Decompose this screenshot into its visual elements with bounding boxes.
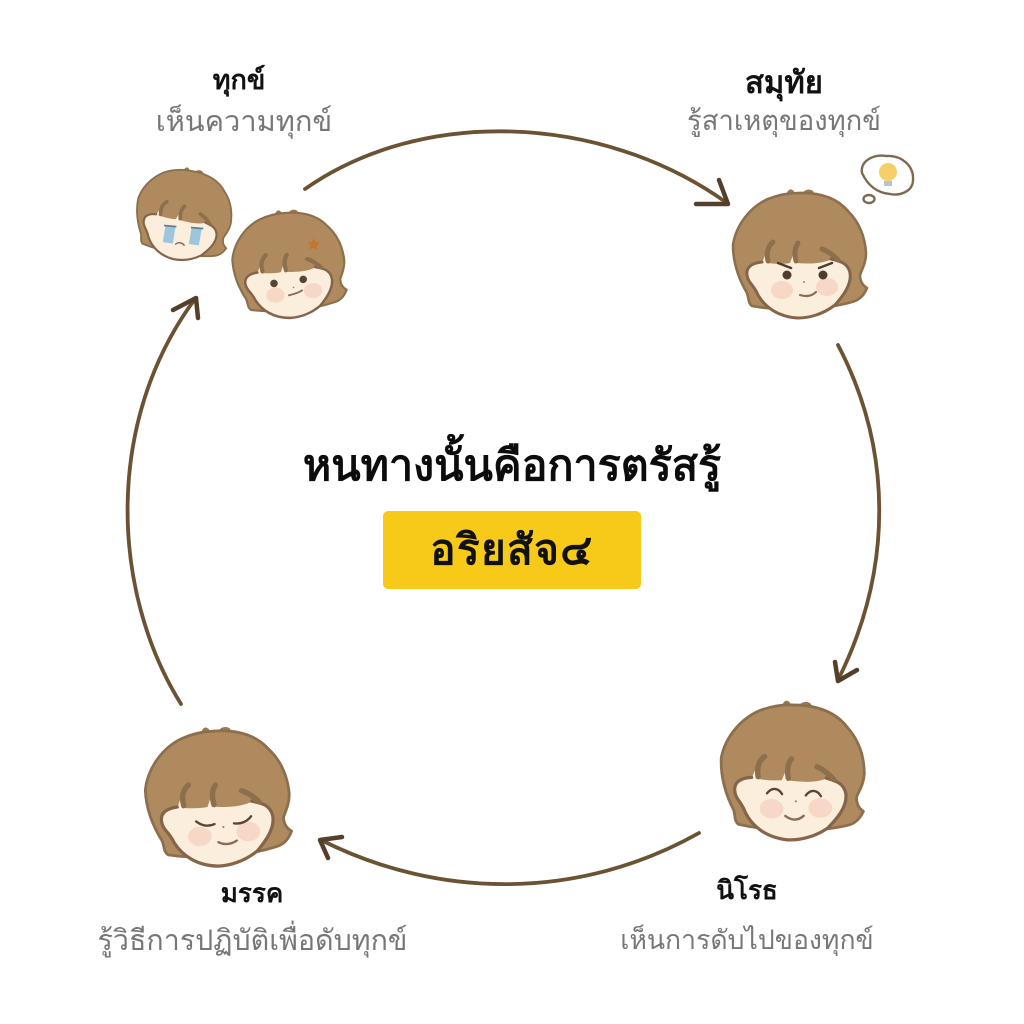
arrow: samudaya to nirodha [835,345,879,681]
heading: dukkha: ทุกข์ [213,65,265,95]
arrow: magga to dukkha [128,298,198,704]
arrow: nirodha to magga [320,833,699,884]
icon: peaceful face [143,726,293,869]
heading: samudaya: สมุทัย [745,65,823,100]
badge: four noble truths [383,511,641,589]
heading: nirodha: นิโรธ [716,875,778,905]
icon: smiling face [717,699,869,844]
icon: annoyed face [230,208,348,321]
arrow: dukkha to samudaya [305,131,728,204]
badge label: อริยสัจ๔ [430,526,594,573]
icon: thought bubble with light bulb [862,156,913,203]
icon: crying face [127,160,241,269]
heading: magga: มรรค [221,878,283,908]
text: samudaya description: รู้สาเหตุของทุกข์ [687,105,881,136]
text: dukkha description: เห็นความทุกข์ [156,106,332,138]
text: magga description: รู้วิธีการปฏิบัติเพื่อดับทุกข์ [98,925,407,957]
text: nirodha description: เห็นการดับไปของทุกข์ [620,925,874,955]
icon: determined face [733,191,867,318]
title: หนทางนั้นคือการตรัสรู้ [303,442,721,490]
